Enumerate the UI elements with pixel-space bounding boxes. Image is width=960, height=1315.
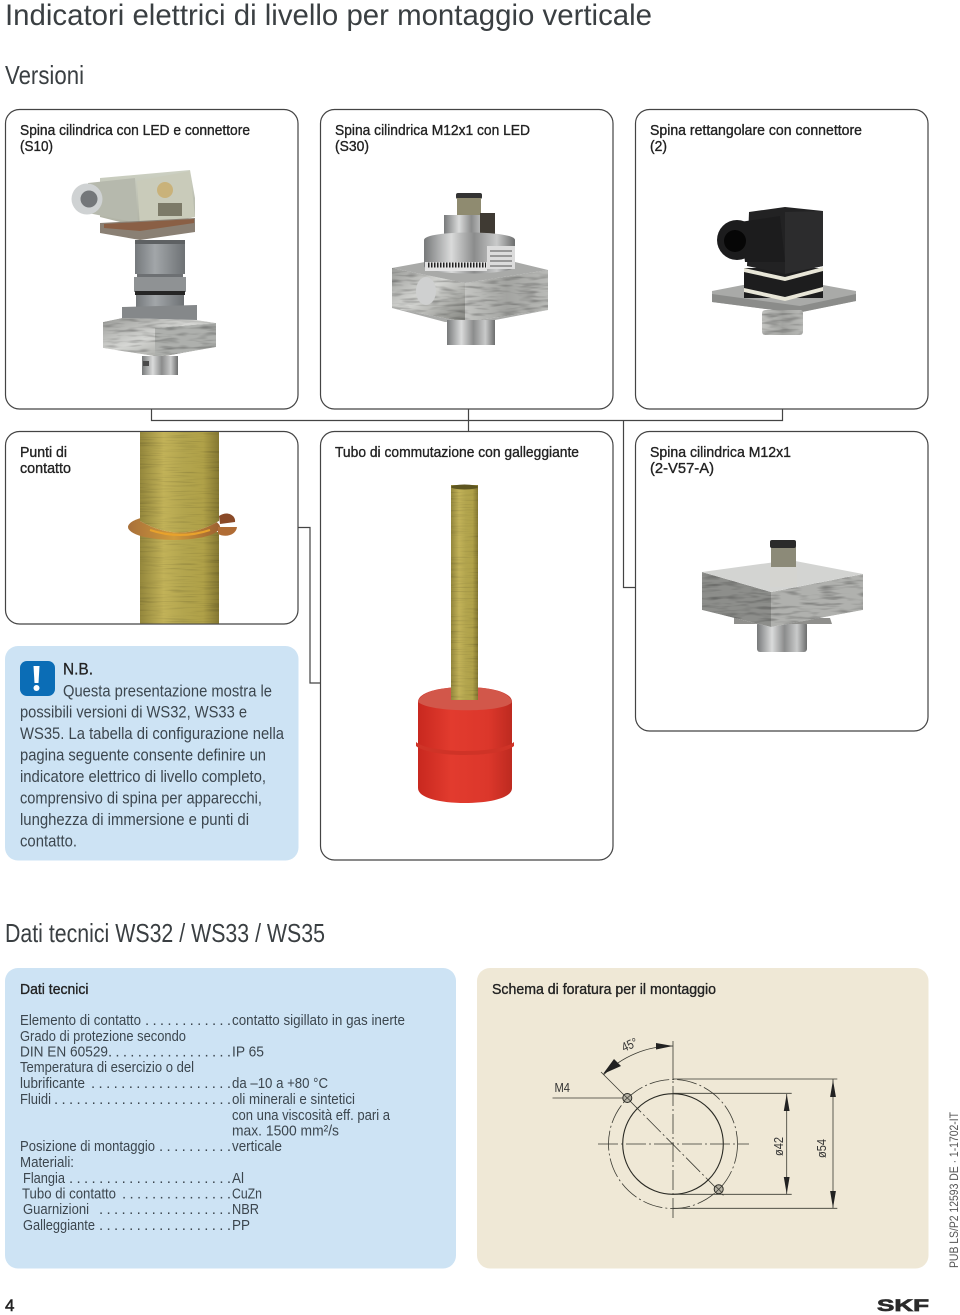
specification list: ...................... (69, 1170, 231, 1187)
panel heading: Schema di foratura per il montaggio (492, 981, 716, 998)
photo: S10 plug (72, 170, 216, 375)
specification list: Grado di protezione secondo (20, 1028, 186, 1045)
specification list: ................... (91, 1075, 231, 1092)
inner bore circle (623, 1094, 723, 1194)
label: Spina rettangolare con connettore (650, 122, 862, 139)
angle dimension 45 degrees: 45° (619, 1035, 640, 1055)
label: (S30) (335, 138, 369, 155)
specification list: .......... (159, 1138, 231, 1155)
panel: contact points (6, 432, 298, 624)
specification list: Guarnizioni (23, 1201, 89, 1218)
specification list: da –10 a +80 °C (232, 1075, 328, 1092)
specification list: contatto sigillato in gas inerte (232, 1012, 405, 1029)
specification list: Fluidi (20, 1091, 51, 1108)
specification list: .................. (99, 1217, 231, 1234)
panel: technical data (5, 968, 456, 1268)
specification list: ........................ (54, 1091, 231, 1108)
panel: cylindrical plug M12x1 2-V57-A (636, 432, 928, 731)
note heading: N.B. (63, 660, 93, 678)
specification list: NBR (232, 1201, 259, 1218)
specification list: con una viscosità eff. pari a (232, 1107, 391, 1124)
specification list: Tubo di contatto (22, 1186, 116, 1202)
specification list: Galleggiante (23, 1217, 95, 1234)
specification list: ............ (145, 1012, 231, 1029)
specification list: verticale (232, 1138, 282, 1155)
label: Tubo di commutazione con galleggiante (335, 444, 579, 461)
specification list: Temperatura di esercizio o del (20, 1059, 194, 1076)
heading: technical data: Dati tecnici WS32 / WS33 / WS35 (5, 918, 325, 948)
note text: pagina seguente consente definire un (20, 746, 266, 764)
note text: lunghezza di immersione e punti di (20, 810, 249, 829)
label (20, 122, 250, 155)
label (650, 444, 791, 477)
callout: N.B. note (5, 646, 298, 860)
specification list: ................. (108, 1044, 231, 1060)
specification list: DIN EN 60529 (20, 1044, 108, 1060)
specification list: PP (232, 1217, 250, 1234)
label (650, 122, 862, 155)
photo: rectangular plug (712, 207, 856, 335)
photo: S30 plug (392, 193, 548, 345)
note text: possibili versioni di WS32, WS33 e (20, 702, 247, 722)
label: (S10) (20, 138, 53, 155)
specification list: Posizione di montaggio (20, 1138, 155, 1155)
note text: Questa presentazione mostra le (63, 682, 272, 700)
screw holes M4 (623, 1094, 723, 1194)
outer dash-dot bolt circle (608, 1080, 738, 1208)
angle dimension 45 degrees (603, 1035, 673, 1075)
technical drawing: hole pattern (552, 1035, 837, 1218)
specification list: oli minerali e sintetici (232, 1091, 355, 1108)
dimension diameter 54 (673, 1079, 837, 1208)
note text: comprensivo di spina per apparecchi, (20, 788, 262, 808)
specification list: Materiali: (20, 1154, 74, 1171)
specification list: Elemento di contatto (20, 1012, 141, 1029)
panel: switching tube with float (320, 432, 613, 860)
photo: float and tube (416, 484, 514, 803)
note text: indicatore elettrico di livello completo, (20, 767, 266, 786)
specification list: CuZn (232, 1186, 262, 1202)
label M4 with leader (552, 1080, 623, 1098)
note text: WS35. La tabella di configurazione nella (20, 724, 284, 743)
specification list: Flangia (23, 1170, 66, 1187)
panel: cylindrical plug with LED and connector S10 (6, 110, 298, 409)
photo: contact tube with ring (128, 432, 237, 624)
dimension diameter 54: ø54 (814, 1139, 829, 1158)
page number: 4 (5, 1296, 14, 1315)
specification list: lubrificante (20, 1075, 85, 1092)
label: (2) (650, 138, 667, 155)
panel heading: Dati tecnici (20, 981, 88, 998)
specification list (20, 1012, 405, 1234)
icon: exclamation mark (20, 661, 55, 696)
label: Spina cilindrica con LED e connettore (20, 122, 250, 139)
note text: contatto. (20, 832, 77, 850)
label: (2-V57-A) (650, 460, 714, 477)
dimension diameter 42: ø42 (771, 1137, 786, 1156)
label M4 with leader: M4 (554, 1080, 570, 1095)
photo: M12 plug (702, 540, 863, 652)
dimension diameter 42 (673, 1093, 792, 1194)
specification list: max. 1500 mm²/s (232, 1122, 339, 1140)
specification list: Al (232, 1170, 244, 1187)
note text (20, 682, 284, 850)
panel: mounting hole pattern (477, 968, 928, 1268)
connector lines between panels (152, 409, 782, 683)
panel: cylindrical plug M12x1 with LED S30 (320, 110, 613, 409)
specification list: IP 65 (232, 1044, 264, 1060)
label: Spina cilindrica M12x1 con LED (335, 122, 530, 139)
label (335, 122, 530, 155)
specification list: .................. (99, 1201, 231, 1218)
centre lines (598, 1041, 749, 1218)
logo: SKF: SKF (877, 1296, 929, 1315)
heading: versions: Versioni (5, 60, 84, 90)
label: contatto (20, 460, 71, 477)
panel: rectangular plug with connector (636, 110, 928, 409)
label (20, 444, 71, 477)
label: Punti di (20, 444, 67, 461)
specification list: ............... (122, 1186, 231, 1202)
label: Spina cilindrica M12x1 (650, 444, 791, 461)
